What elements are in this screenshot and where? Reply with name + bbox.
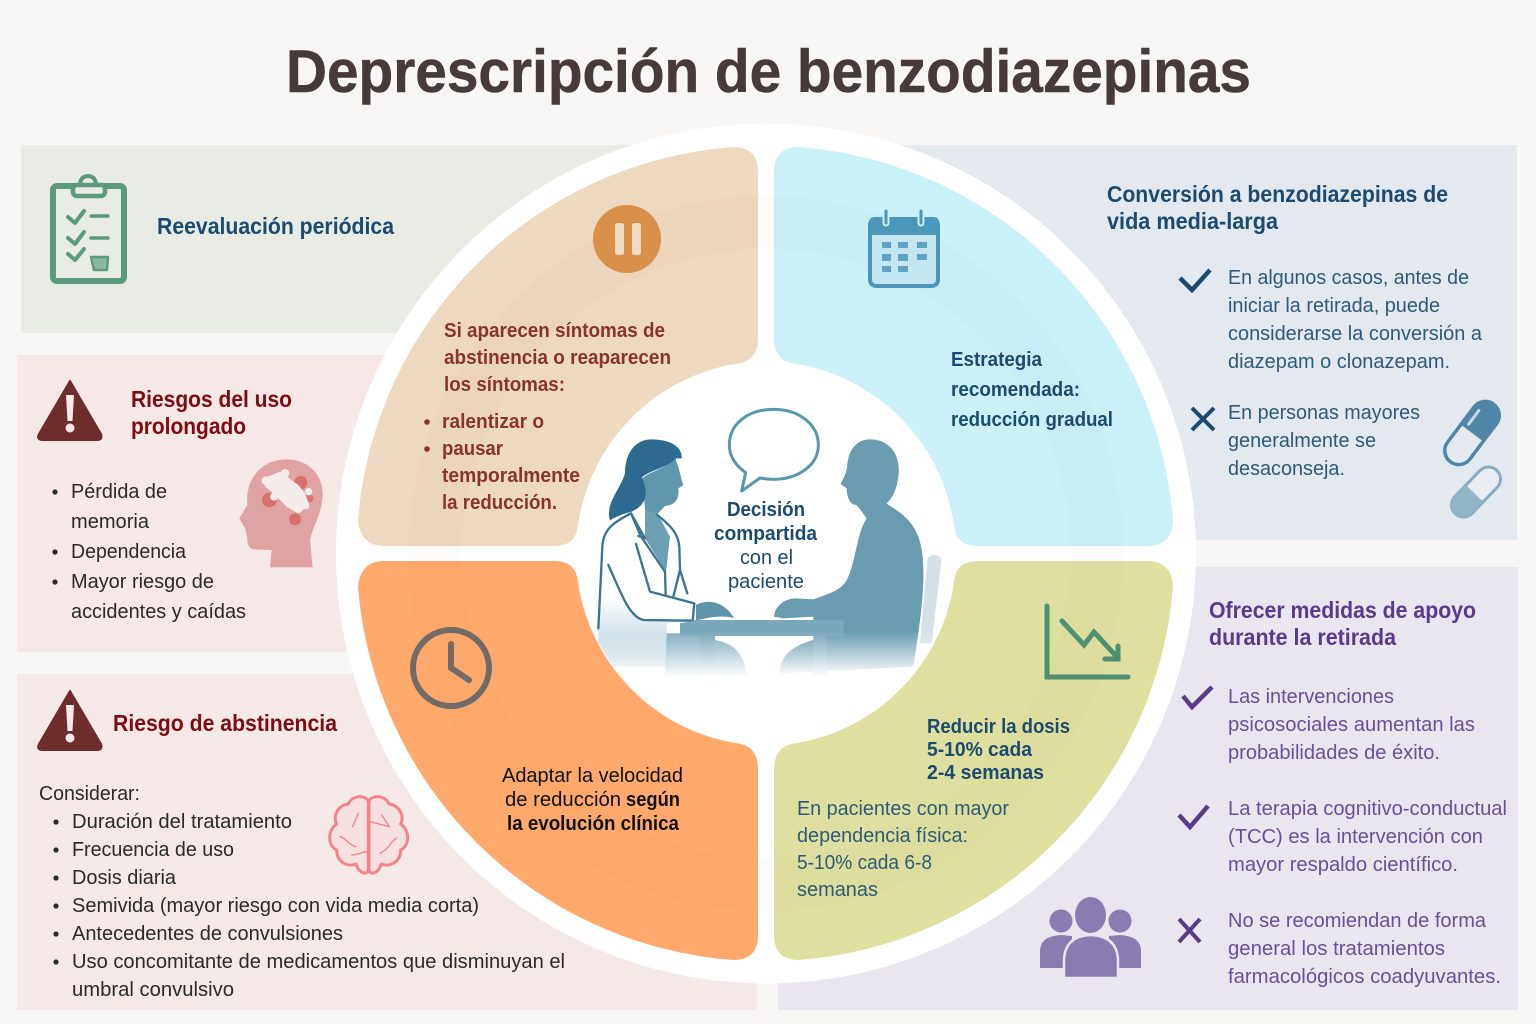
doctor sleeve [628,604,693,620]
icon: head with puzzle [239,459,323,567]
text: tratamientos coadyuvantes: farmacológicos coadyuvantes. [1228,966,1501,988]
patient [774,439,923,673]
list: riesgos del uso: Pérdida de [71,481,167,503]
list: riesgo de abstinencia: Considerar: [39,783,140,805]
panel: riesgo de abstinencia [17,674,757,1010]
text: reducir la dosis: Reducir la dosis [927,716,1070,738]
center text: compartida [714,523,818,545]
icon: warning triangle [38,691,102,750]
icon: clock [413,630,489,706]
text: síntomas de abstinencia: los síntomas: [444,374,565,396]
heading: medidas de apoyo: Ofrecer medidas de apoyo [1209,597,1476,623]
center illustration: doctor and patient [597,408,942,674]
icon: cross [1179,919,1200,942]
text: reducir la dosis [797,716,1070,901]
list: riesgo de abstinencia: Duración del tratamiento [72,811,292,833]
text: conversión recomendada: En algunos casos, antes de [1228,267,1469,289]
text: tratamientos coadyuvantes [1228,910,1501,988]
doctor coat outline [598,513,694,628]
heading: medidas de apoyo: durante la retirada [1209,624,1396,650]
list: riesgos del uso: Mayor riesgo de [71,571,214,593]
list: riesgo de abstinencia: umbral convulsivo [72,979,234,1001]
fade overlay [598,634,932,676]
center text [714,499,818,593]
text: reducir la dosis: 2-4 semanas [927,762,1044,784]
text: estrategia recomendada: recomendada: [951,379,1080,401]
icon: cross [1192,408,1214,430]
speech bubble [729,409,818,491]
heading: riesgos del uso prolongado: prolongado [131,413,246,439]
heading: conversión: vida media-larga [1107,208,1278,234]
center text: Decisión [727,499,805,521]
text: estrategia recomendada: Estrategia [951,349,1043,371]
heading: conversión: Conversión a benzodiazepinas de [1107,181,1448,207]
icon: calendar [869,211,939,286]
text: conversión recomendada: considerarse la conversión a [1228,323,1483,345]
icon: brain [330,797,408,873]
heading: medidas de apoyo [1209,597,1476,650]
panel: riesgos del uso prolongado [17,355,417,652]
text: personas mayores: generalmente se [1228,430,1376,452]
text: intervenciones psicosociales [1228,686,1475,764]
text: intervenciones psicosociales: probabilidades de éxito. [1228,742,1440,764]
text: estrategia recomendada: reducción gradual [951,409,1113,431]
text: reducir la dosis: dependencia física: [797,825,968,847]
text: personas mayores: En personas mayores [1228,402,1420,424]
text: síntomas de abstinencia: la reducción. [442,492,557,514]
text: estrategia recomendada [951,349,1113,431]
list: riesgos del uso: accidentes y caídas [71,601,246,623]
text: adaptar la velocidad [502,765,683,835]
table [680,620,843,677]
wheel white base [336,124,1196,984]
heading: conversión [1107,181,1448,234]
list: riesgo de abstinencia [39,783,565,1001]
list: riesgo de abstinencia: Dosis diaria [72,867,177,889]
text: personas mayores [1228,402,1420,480]
heading: reevaluación periódica: Reevaluación periódica [157,213,394,239]
text: adaptar la velocidad: de reducción [505,789,621,811]
panel: reevaluación periódica [21,145,661,333]
text: reducir la dosis: semanas [797,879,878,901]
list: riesgo de abstinencia: Frecuencia de uso [72,839,234,861]
text: síntomas de abstinencia: abstinencia o reaparecen [444,347,671,369]
doctor shirt [645,510,670,572]
center text: paciente [728,571,804,593]
quadrant: síntomas de abstinencia [358,147,758,546]
text: tratamientos coadyuvantes: general los tratamientos [1228,938,1445,960]
panel: medidas de apoyo [778,567,1518,1010]
list: riesgo de abstinencia: Antecedentes de convulsiones [72,923,343,945]
icon: check [1180,270,1210,290]
doctor hair [609,439,682,521]
quadrant: reducir la dosis [774,561,1173,960]
doctor coat [598,604,683,666]
text: terapia cognitivo-conductual [1228,798,1507,876]
text: adaptar la velocidad: según [626,789,680,811]
doctor face and neck [643,458,683,514]
list: riesgo de abstinencia: Semivida (mayor riesgo con vida media corta) [72,895,479,917]
center text: con el [740,547,793,569]
text: adaptar la velocidad: la evolución clínica [507,813,680,835]
text: terapia cognitivo-conductual: La terapia cognitivo-conductual [1228,798,1507,820]
central wheel [336,124,1196,984]
text: conversión recomendada [1228,267,1483,373]
title: Deprescripción de benzodiazepinas [286,38,1251,105]
quadrant: adaptar la velocidad [358,561,758,960]
text: conversión recomendada: iniciar la retirada, puede [1228,295,1440,317]
text: intervenciones psicosociales: psicosociales aumentan las [1228,714,1475,736]
panel: conversión [770,145,1517,540]
icon: warning triangle [38,381,102,440]
list: riesgos del uso [52,481,246,623]
text: terapia cognitivo-conductual: mayor respaldo científico. [1228,854,1458,876]
text: síntomas de abstinencia: pausar [442,438,503,460]
faint wheel ring [435,222,1097,884]
doctor hand [696,602,734,621]
heading: riesgo de abstinencia: Riesgo de abstinencia [113,710,337,736]
text: personas mayores: desaconseja. [1228,458,1345,480]
heading: riesgos del uso prolongado [131,386,292,439]
quadrant: estrategia recomendada [774,147,1173,546]
text: síntomas de abstinencia: temporalmente [442,465,580,487]
icon: check [1183,687,1212,707]
text: reducir la dosis: En pacientes con mayor [797,798,1009,820]
icon: pause [593,205,661,273]
text: conversión recomendada: diazepam o clonazepam. [1228,351,1450,373]
icon: clipboard [53,176,124,281]
text: tratamientos coadyuvantes: No se recomiendan de forma [1228,910,1487,932]
text: síntomas de abstinencia: ralentizar o [442,411,544,433]
text: reducir la dosis: 5-10% cada [927,739,1033,761]
chair [920,555,941,643]
icon: group of people [1040,897,1141,978]
heading: riesgos del uso prolongado: Riesgos del uso [131,386,292,412]
text: síntomas de abstinencia: Si aparecen síntomas de [444,320,665,342]
list: riesgo de abstinencia: Uso concomitante de medicamentos que disminuyan el [72,951,565,973]
text: intervenciones psicosociales: Las intervenciones [1228,686,1394,708]
list: riesgos del uso: memoria [71,511,150,533]
icon: descending chart [1047,606,1128,677]
icon: capsules [1439,396,1505,522]
list: riesgos del uso: Dependencia [71,541,187,563]
text: síntomas de abstinencia [424,320,671,514]
text: reducir la dosis: 5-10% cada 6-8 [797,852,932,874]
text: adaptar la velocidad: Adaptar la velocidad [502,765,683,787]
text: terapia cognitivo-conductual: (TCC) es la intervención con [1228,826,1483,848]
icon: check [1179,806,1208,827]
doctor legs [665,633,747,677]
